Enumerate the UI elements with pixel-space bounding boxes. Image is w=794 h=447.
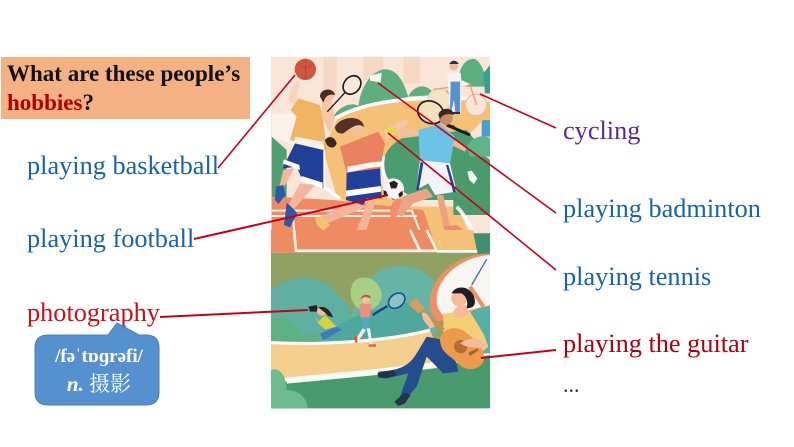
connector: cycling xyxy=(480,94,556,128)
label: cycling: cycling xyxy=(563,116,640,145)
label: photography: photography xyxy=(27,298,161,327)
clock xyxy=(430,253,490,322)
connector: tennis xyxy=(388,133,556,270)
illustration top scene: sports xyxy=(271,57,490,240)
callout: pronunciation xyxy=(35,323,159,405)
callout: pronunciation: /fəˈtɒɡrəfi/ xyxy=(54,346,144,367)
illustration: people doing hobbies xyxy=(271,57,490,408)
callout: pronunciation: n. 摄影 xyxy=(67,372,131,396)
label: ellipsis: ... xyxy=(563,372,580,397)
panel: question heading: What are these people’s xyxy=(7,61,240,86)
label: playing badminton: playing badminton xyxy=(563,194,761,223)
label: playing basketball: playing basketball xyxy=(27,151,219,180)
connector: guitar xyxy=(481,350,556,358)
connector: photography xyxy=(160,310,308,317)
label: playing tennis: playing tennis xyxy=(563,262,711,291)
football player xyxy=(315,118,408,239)
cycling person xyxy=(428,61,487,116)
photographer xyxy=(308,305,342,340)
label: playing football: playing football xyxy=(27,224,194,253)
tennis player xyxy=(390,97,470,234)
illustration bottom scene: leisure xyxy=(271,230,490,408)
connector: badminton xyxy=(378,83,556,213)
label: playing the guitar: playing the guitar xyxy=(563,329,749,358)
panel: question heading: hobbies? xyxy=(7,90,94,115)
panel: question heading xyxy=(1,57,250,119)
connector: basketball xyxy=(218,75,295,168)
connector: football xyxy=(194,195,388,239)
basketball player xyxy=(275,59,365,227)
girl with racket xyxy=(354,290,408,347)
guitar player xyxy=(377,287,488,406)
